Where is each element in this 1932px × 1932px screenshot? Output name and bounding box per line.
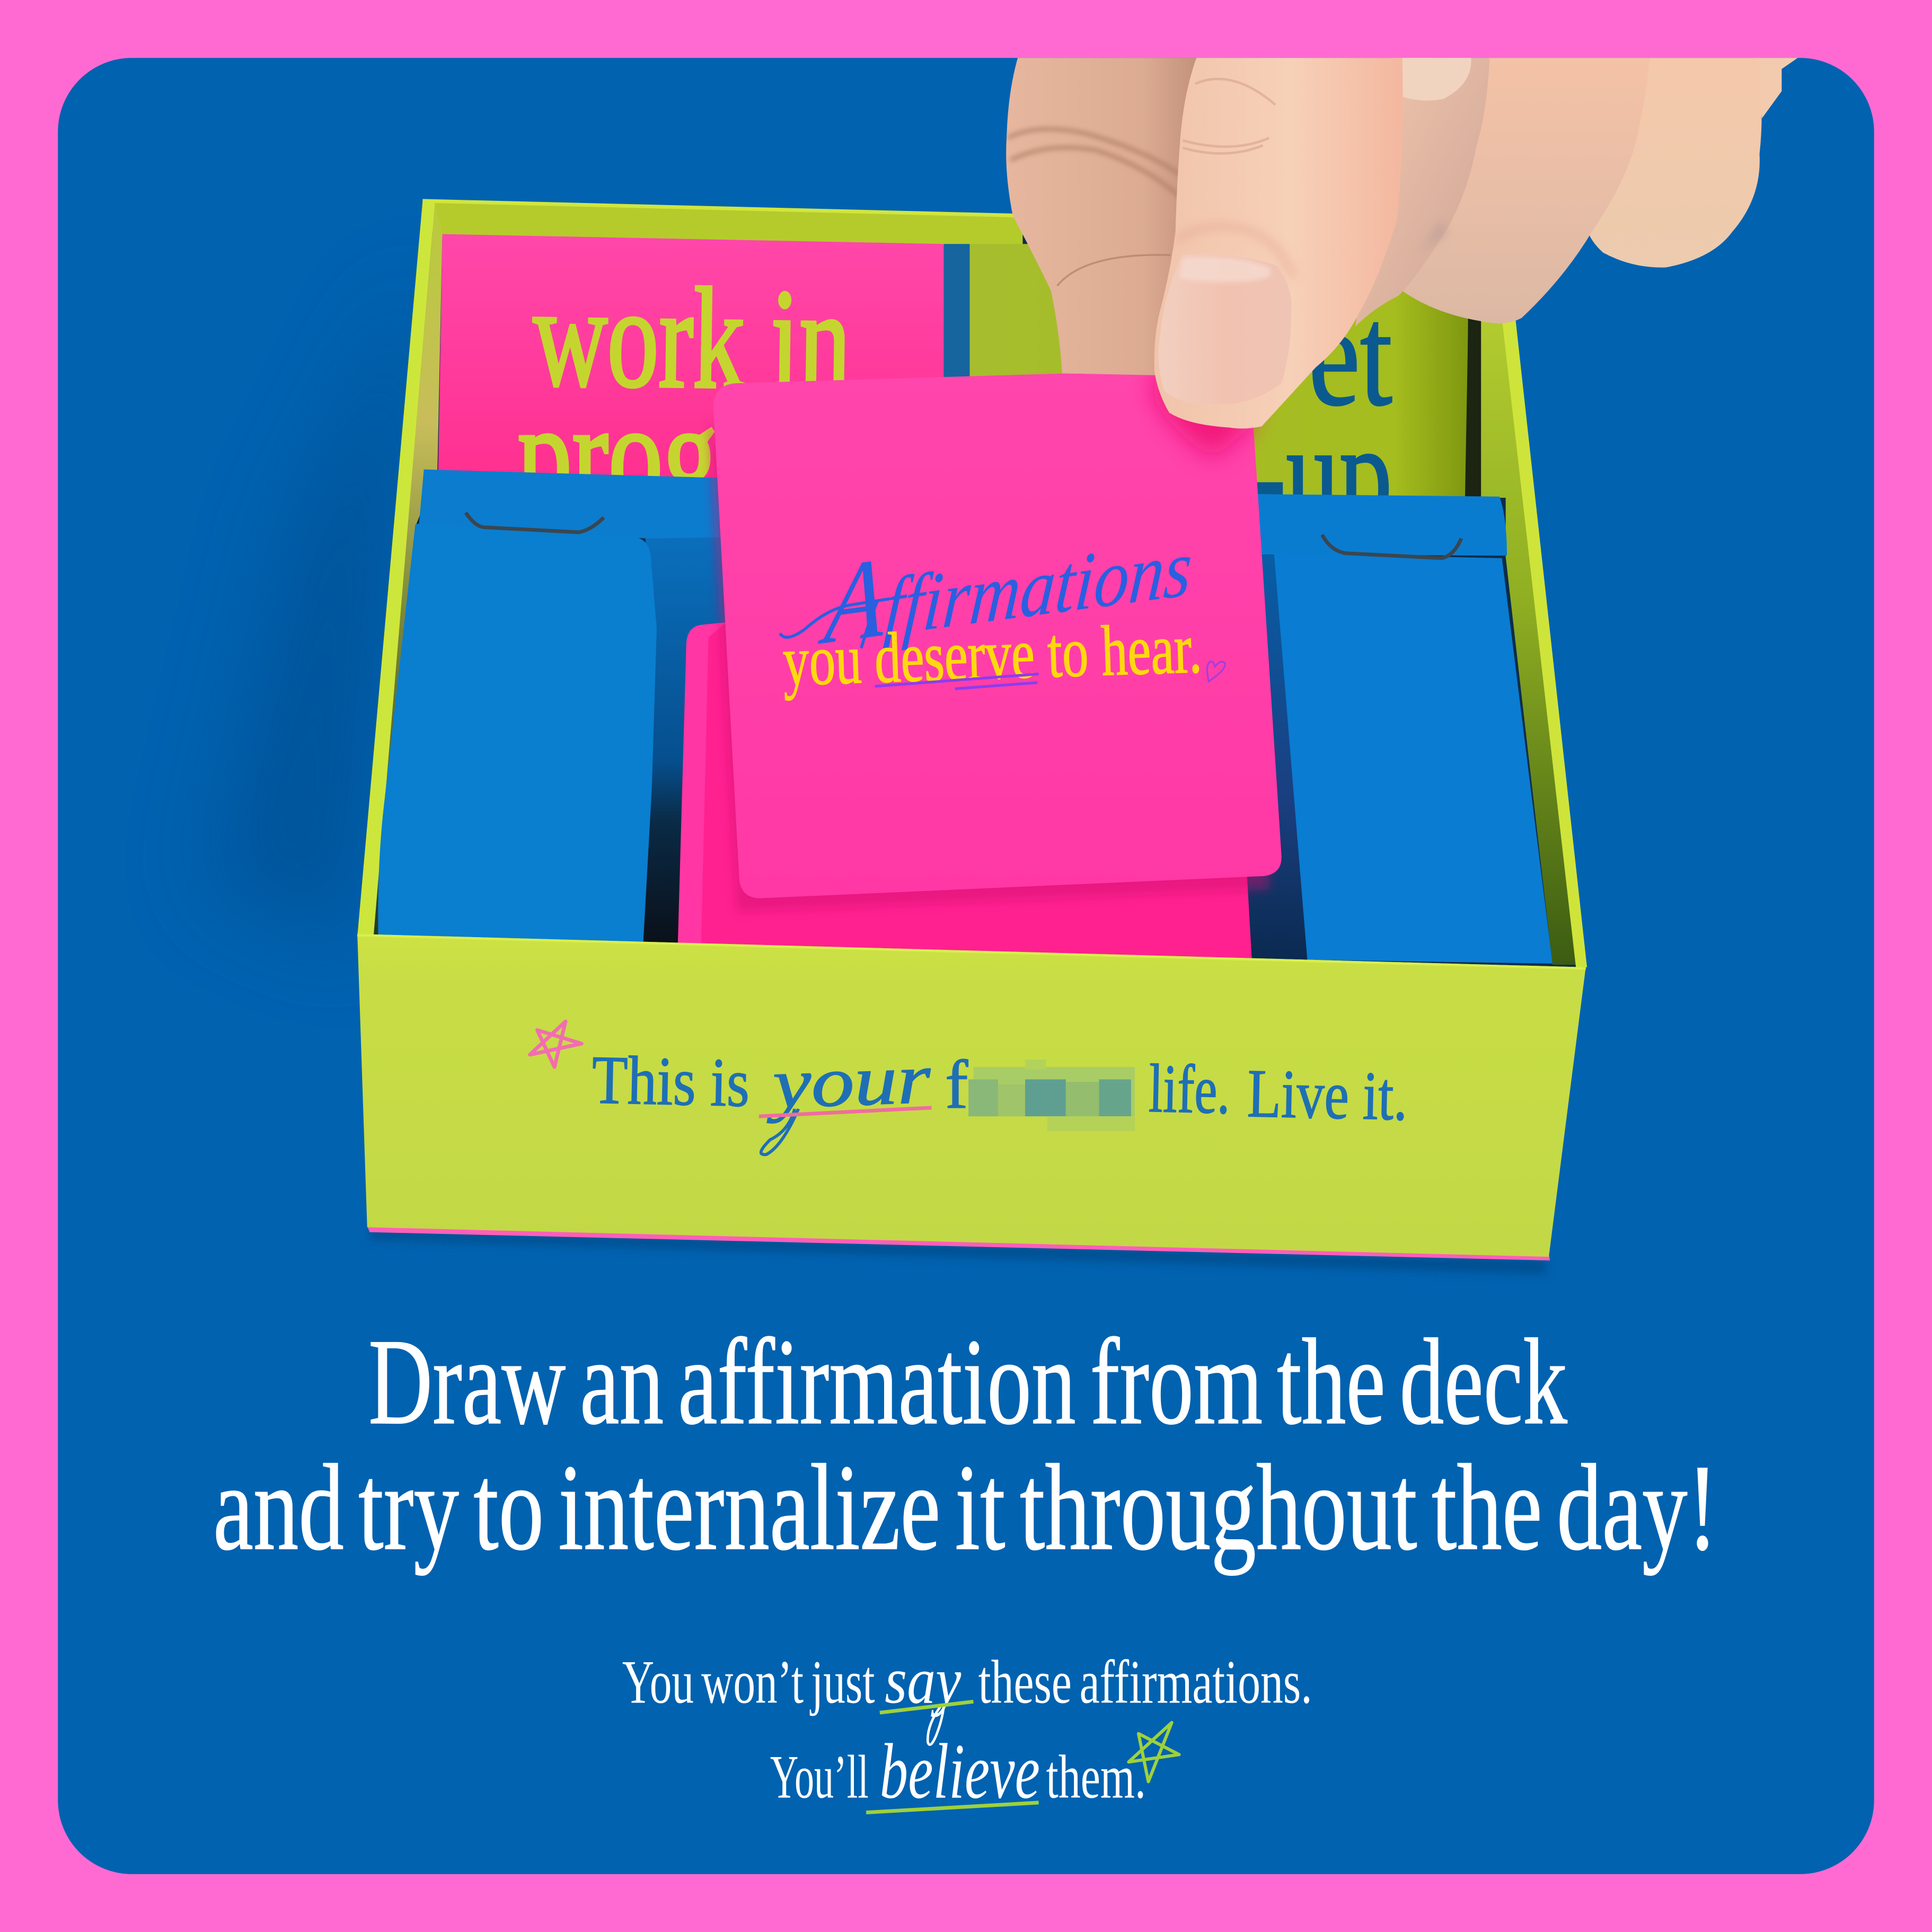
shadow under finger on card bbox=[1152, 369, 1252, 458]
dark gap behind card bbox=[1465, 296, 1481, 498]
box slogan: This is bbox=[591, 1042, 751, 1122]
staple bbox=[466, 513, 604, 532]
gap behind left deck bbox=[641, 530, 727, 949]
finger shading bbox=[1417, 219, 1448, 253]
slogan underline bbox=[759, 1108, 931, 1116]
card underlines bbox=[875, 674, 1039, 689]
card logo: Affirmations: Affirmations bbox=[816, 492, 1198, 669]
ring finger bbox=[1402, 58, 1650, 323]
tagline green underlines bbox=[866, 1701, 1039, 1813]
right rim bbox=[1501, 308, 1587, 967]
box drop shadow bbox=[209, 271, 1546, 1274]
box interior bbox=[357, 201, 1586, 967]
box slogan: f bbox=[945, 1047, 968, 1123]
icon: green star bbox=[1128, 1723, 1179, 1781]
box slogan: Live it. bbox=[1247, 1055, 1408, 1135]
centre pink deck bbox=[678, 616, 1252, 961]
blue strip between back cards bbox=[944, 244, 969, 394]
back card: green bbox=[969, 244, 1469, 554]
icon: heart bbox=[1207, 661, 1225, 682]
box slogan bbox=[591, 1039, 1408, 1154]
little finger stub bbox=[1756, 58, 1798, 118]
tagline: say bbox=[885, 1644, 961, 1718]
left rim bbox=[357, 201, 435, 939]
main pink card bbox=[709, 368, 1282, 912]
right blue deck bbox=[1247, 494, 1552, 964]
logo swash bbox=[780, 599, 889, 648]
back rim bbox=[422, 201, 1022, 246]
tagline bbox=[622, 1644, 1312, 1815]
back card: work in progress bbox=[437, 234, 944, 534]
product box bbox=[357, 201, 1587, 1260]
tagline: them. bbox=[1046, 1743, 1146, 1812]
tagline: You won’t just bbox=[622, 1648, 875, 1717]
little finger bbox=[1587, 58, 1762, 268]
left inner wall bbox=[373, 202, 443, 939]
left blue deck bbox=[378, 470, 727, 949]
box slogan: your bbox=[764, 1039, 932, 1124]
card logo: you deserve to hear: you deserve to hear. bbox=[782, 609, 1203, 701]
icon: pink star bbox=[530, 1021, 581, 1067]
back card: green: et bbox=[1309, 276, 1393, 435]
fingernail bbox=[1158, 254, 1292, 404]
middle finger bbox=[1355, 58, 1489, 327]
hand holding the card bbox=[1006, 58, 1798, 429]
back card: work in progress: work in bbox=[532, 256, 852, 420]
index finger bbox=[1006, 58, 1202, 376]
pixelated censored word bbox=[968, 1060, 1135, 1131]
tagline: You’ll bbox=[770, 1743, 869, 1812]
nail lunula bbox=[1179, 257, 1271, 282]
staple bbox=[1322, 535, 1461, 558]
back card: work in progress: progress bbox=[517, 374, 887, 534]
headline bbox=[213, 1314, 1718, 1576]
back card: green: -up bbox=[1250, 394, 1392, 554]
right inner wall bbox=[1479, 308, 1577, 965]
front wall bbox=[357, 934, 1586, 1260]
card shadow bbox=[709, 419, 1269, 912]
tagline: these affirmations. bbox=[978, 1648, 1312, 1717]
box slogan: life. bbox=[1148, 1051, 1231, 1128]
thumb front finger bbox=[1154, 58, 1403, 429]
tagline: believe bbox=[880, 1728, 1040, 1815]
